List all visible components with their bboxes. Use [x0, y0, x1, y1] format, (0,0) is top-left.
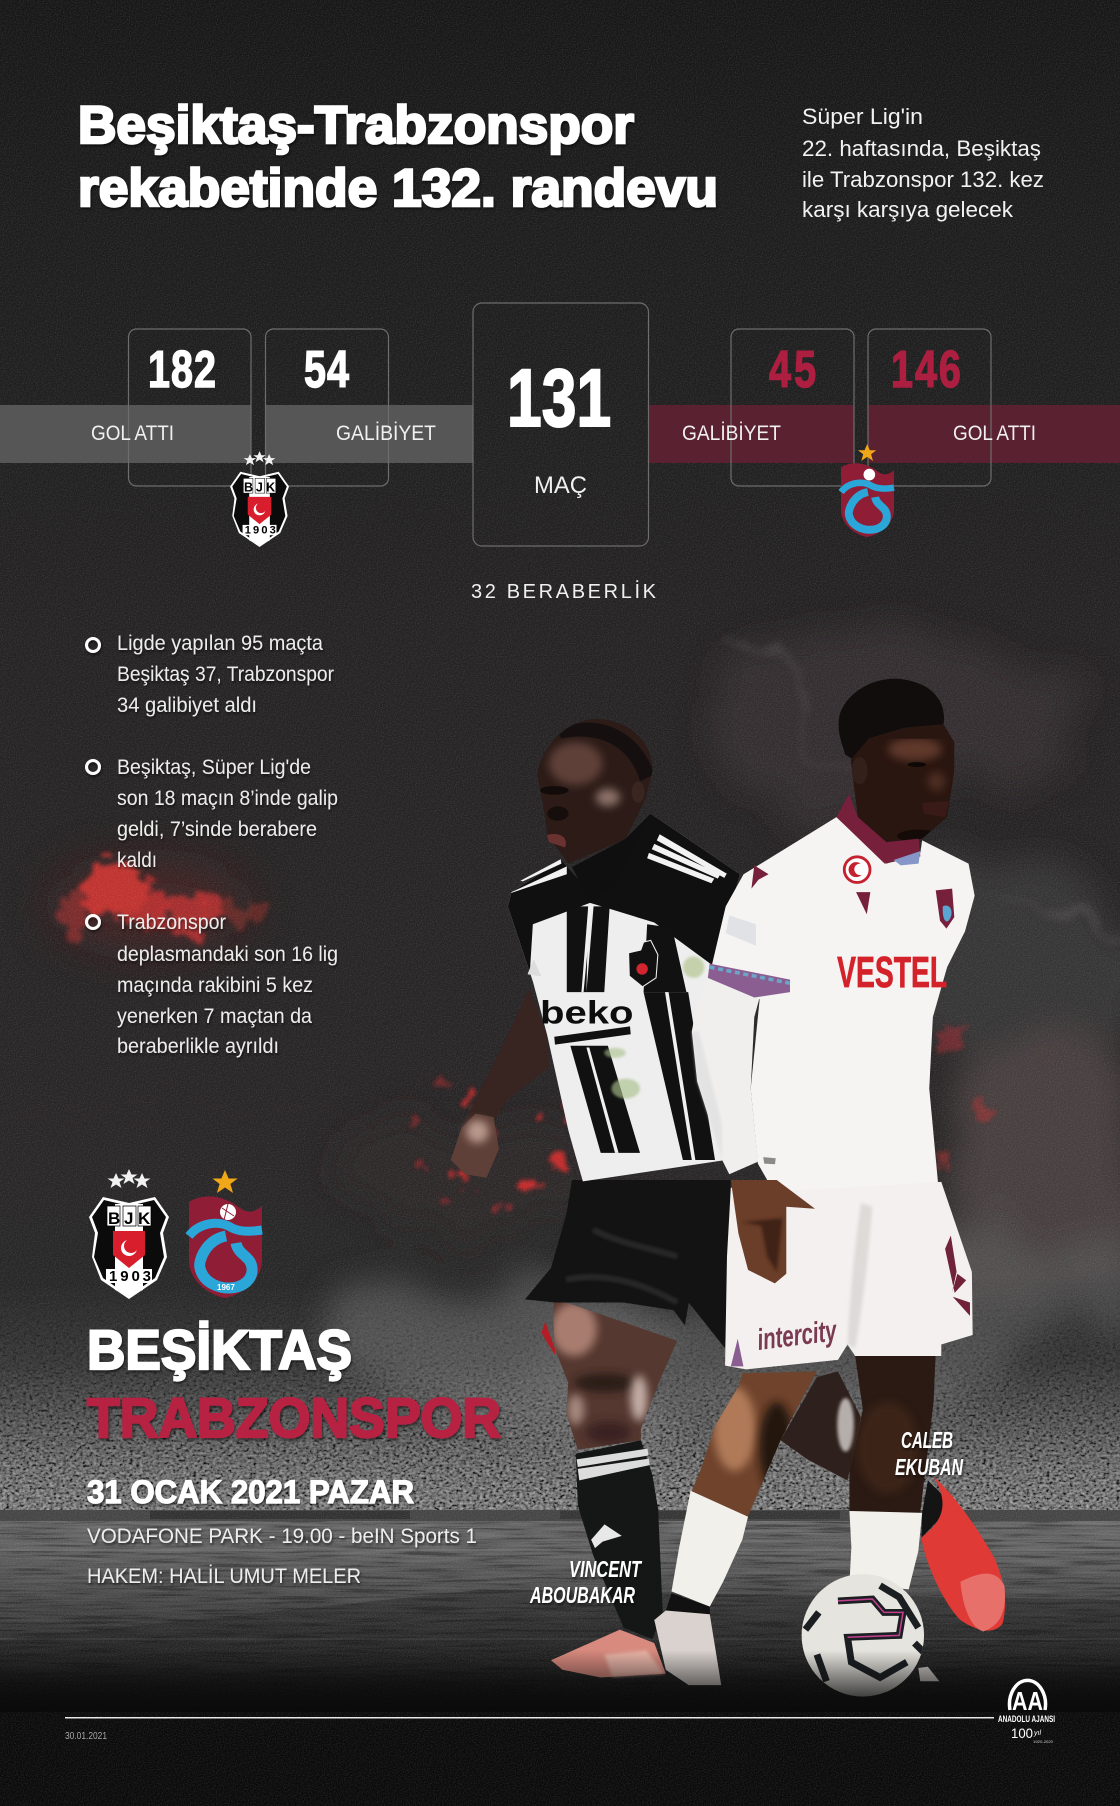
player: Caleb Ekuban — [654, 679, 975, 1697]
title — [78, 96, 718, 218]
player name: Caleb Ekuban: EKUBAN — [895, 1454, 963, 1480]
bullet 3: beraberlikle ayrıldı — [117, 1035, 279, 1058]
stat cards — [128, 303, 991, 546]
lower body — [525, 1180, 1005, 1677]
title: Beşiktaş-Trabzonspor — [78, 96, 634, 155]
icon: Besiktas crest small — [230, 451, 289, 547]
upper body: beko — [540, 994, 634, 1031]
torso, arm and head: VESTEL — [837, 949, 947, 997]
icon: Besiktas crest large: K — [138, 1209, 151, 1228]
logo: Anadolu Ajansi: ANADOLU AJANSI — [998, 1714, 1055, 1724]
bullet 3 — [86, 911, 338, 1058]
intro text: karşı karşıya gelecek — [802, 197, 1014, 222]
icon: Besiktas crest large — [89, 1169, 169, 1299]
red paint splash — [55, 860, 990, 1216]
shorts and hand: intercity — [755, 1314, 839, 1357]
match date: 31 OCAK 2021 PAZAR — [87, 1474, 414, 1510]
bullet list — [86, 632, 338, 1058]
bullet 2: kaldı — [117, 849, 157, 872]
match referee: HAKEM: HALİL UMUT MELER — [87, 1565, 361, 1588]
stat labels: MAÇ — [534, 472, 587, 499]
logo: Anadolu Ajansi: yıl — [1033, 1730, 1041, 1737]
bullet 1: 34 galibiyet aldı — [117, 694, 257, 717]
torso, arm and head — [692, 679, 975, 1203]
bullet 1: Beşiktaş 37, Trabzonspor — [117, 663, 334, 686]
stat labels: GOL ATTI — [953, 422, 1036, 445]
bullet 3: yenerken 7 maçtan da — [117, 1005, 312, 1028]
stat labels — [91, 422, 1036, 603]
footer rule — [65, 1717, 994, 1718]
bullet 1 — [86, 632, 334, 717]
player name: Vincent Aboubakar: VINCENT — [569, 1556, 642, 1582]
stadium crowd — [0, 1308, 1120, 1510]
icon: Besiktas crest large: 1903 — [109, 1268, 151, 1285]
bullet 3: maçında rakibini 5 kez — [117, 974, 313, 997]
icon: Besiktas crest small: K — [266, 481, 275, 495]
stat labels: GALİBİYET — [682, 422, 781, 445]
player: Vincent Aboubakar — [451, 719, 1005, 1677]
icon: Besiktas crest large: J — [124, 1209, 133, 1228]
match heading: Besiktas: BEŞİKTAŞ — [87, 1318, 352, 1381]
logo: Anadolu Ajansi: 100 — [1011, 1725, 1033, 1741]
icon: Trabzonspor crest small — [841, 444, 894, 537]
upper body — [451, 719, 751, 1185]
stat numbers: 146 — [891, 340, 961, 398]
intro text — [802, 104, 1044, 222]
stat labels: GALİBİYET — [336, 422, 436, 445]
title: rekabetinde 132. randevu — [78, 159, 718, 218]
player name: Vincent Aboubakar: ABOUBAKAR — [529, 1582, 635, 1608]
icon: Besiktas crest small: J — [256, 481, 263, 495]
legs and ball — [654, 1356, 939, 1697]
match heading: Trabzonspor: TRABZONSPOR — [87, 1386, 501, 1449]
bullet 1: Ligde yapılan 95 maçta — [117, 632, 323, 655]
player name: Vincent Aboubakar — [529, 1556, 642, 1608]
stat labels: 32 BERABERLİK — [471, 580, 657, 603]
icon: Besiktas crest large: B — [108, 1209, 120, 1228]
icon: Besiktas crest small: B — [244, 481, 253, 495]
intro text: 22. haftasında, Beşiktaş — [802, 136, 1041, 161]
ground fade under players — [0, 1650, 1120, 1712]
stat numbers: 45 — [769, 340, 816, 398]
match venue: VODAFONE PARK - 19.00 - beIN Sports 1 — [87, 1525, 477, 1548]
intro text: Süper Lig'in — [802, 104, 923, 129]
logo: Anadolu Ajansi: AA — [1012, 1686, 1043, 1716]
bullet 2: geldi, 7’sinde berabere — [117, 818, 317, 841]
stat numbers — [148, 340, 961, 444]
stat labels: GOL ATTI — [91, 422, 174, 445]
player name: Caleb Ekuban: CALEB — [901, 1427, 953, 1453]
stat numbers: 54 — [304, 340, 349, 398]
stat bands — [0, 405, 1120, 463]
icon: Trabzonspor crest large — [189, 1170, 262, 1298]
date: 30.01.2021 — [65, 1730, 107, 1742]
bullet 3: deplasmandaki son 16 lig — [117, 943, 338, 966]
player name: Caleb Ekuban — [895, 1427, 963, 1480]
icon: Besiktas crest small: 1903 — [245, 525, 276, 537]
bullet 2: son 18 maçın 8’inde galip — [117, 787, 338, 810]
intro text: ile Trabzonspor 132. kez — [802, 167, 1044, 192]
bullet 3: Trabzonspor — [117, 911, 226, 934]
stat numbers: 182 — [148, 340, 216, 398]
bullet 2 — [86, 756, 338, 872]
logo: Anadolu Ajansi — [998, 1680, 1055, 1744]
bullet 2: Beşiktaş, Süper Lig'de — [117, 756, 311, 779]
logo: Anadolu Ajansi: 1920-2020 — [1033, 1739, 1054, 1744]
icon: Trabzonspor crest large: 1967 — [217, 1283, 235, 1292]
stat numbers: 131 — [507, 353, 611, 444]
stadium pitch and boards — [0, 1510, 1120, 1674]
shorts and hand — [725, 1180, 973, 1369]
